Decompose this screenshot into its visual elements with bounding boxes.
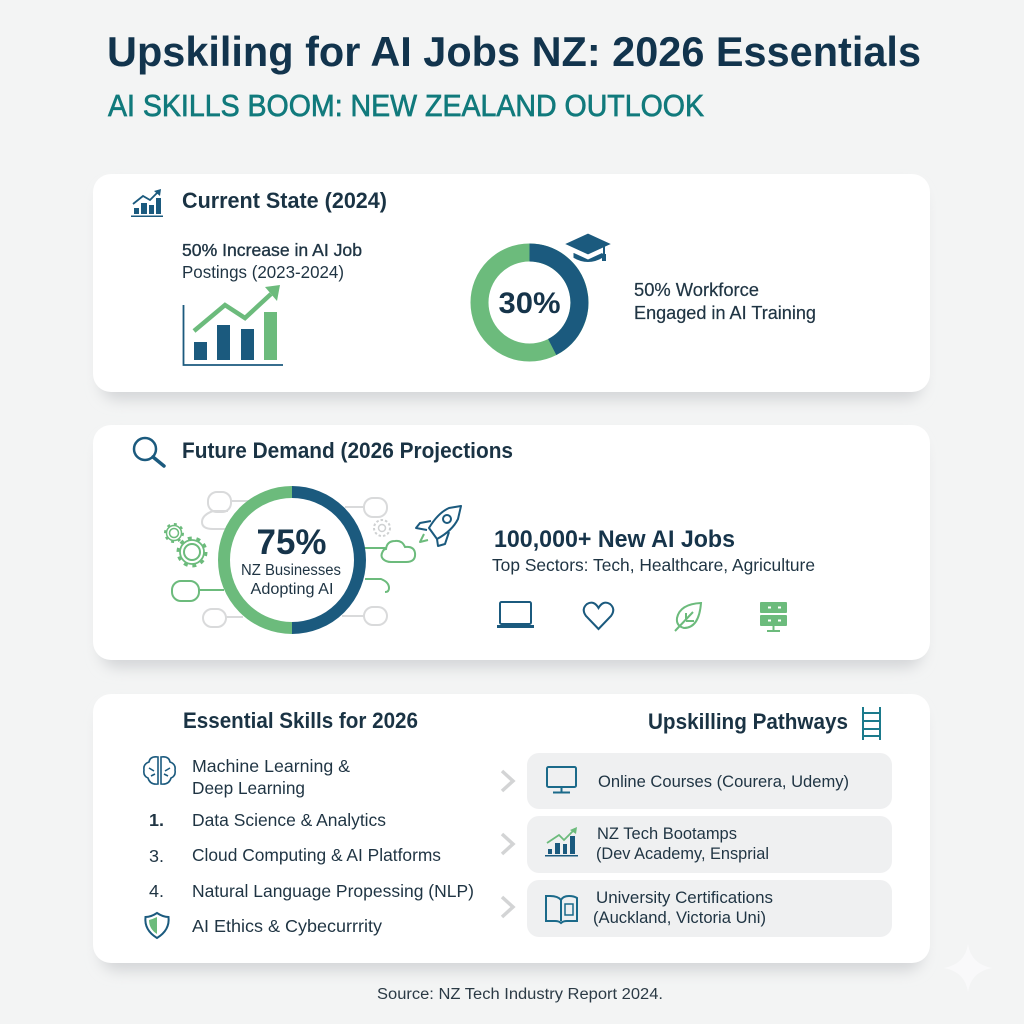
panel: future demand — [93, 425, 930, 668]
stat: workforce — [634, 280, 816, 323]
label: university: University Certifications — [596, 888, 773, 907]
icon: book — [546, 896, 577, 923]
icon: cloud — [382, 541, 415, 562]
stat: job postings: 50% Increase in AI Job — [182, 240, 362, 260]
stat: workforce: Engaged in AI Training — [634, 303, 816, 323]
panel: current state — [93, 174, 930, 400]
donut chart: 75% — [224, 492, 360, 628]
icon: ladder — [863, 707, 880, 740]
panel: skills and pathways — [93, 694, 930, 971]
stat: new jobs: 100,000+ New AI Jobs — [494, 526, 735, 553]
text: top sectors: Top Sectors: Tech, Healthcare, Agriculture — [492, 555, 815, 575]
icon: laptop — [497, 602, 534, 626]
skills list: 4. — [149, 881, 164, 901]
skills list: Cloud Computing & AI Platforms — [192, 845, 441, 865]
label: university — [593, 888, 773, 927]
icon: shield — [145, 913, 169, 938]
skills list: Deep Learning — [192, 778, 305, 798]
network nodes — [172, 492, 389, 627]
skills list: Machine Learning & — [192, 756, 350, 776]
source note: Source: NZ Tech Industry Report 2024. — [377, 986, 663, 1003]
stat: job postings: Postings (2023-2024) — [182, 262, 344, 282]
skills list: Data Science & Analytics — [192, 810, 386, 830]
sparkle mark — [944, 944, 992, 992]
donut chart: 75%: Adopting AI — [250, 581, 334, 598]
donut chart: 75%: 75% — [256, 523, 326, 562]
label: bootcamps — [596, 824, 769, 863]
donut chart: 30%: 30% — [498, 287, 560, 320]
icon: gears — [165, 524, 206, 566]
icon: bootcamp chart — [545, 827, 578, 856]
label: online courses: Online Courses (Courera, Udemy) — [598, 772, 849, 791]
icon: monitor — [547, 767, 576, 792]
icon: brain — [144, 757, 175, 784]
donut chart: 75%: NZ Businesses — [241, 562, 341, 579]
icon: small grey gear — [374, 520, 390, 536]
title: Upskiling for AI Jobs NZ: 2026 Essentials — [107, 28, 921, 75]
icon: server — [760, 602, 787, 632]
label: university: (Auckland, Victoria Uni) — [593, 908, 766, 927]
icon: magnifier — [134, 438, 164, 466]
bar chart with arrow — [184, 285, 283, 365]
donut chart: 30% — [480, 252, 580, 352]
label: bootcamps: (Dev Academy, Ensprial — [596, 844, 769, 863]
icon: rocket — [416, 506, 461, 546]
heading: essential skills: Essential Skills for 2026 — [183, 708, 418, 733]
stat: job postings — [182, 240, 362, 282]
pathway: bootcamps — [527, 816, 892, 873]
skills list: AI Ethics & Cybecurrrity — [192, 916, 382, 936]
pathway: university — [527, 880, 892, 937]
heading: upskilling pathways: Upskilling Pathways — [648, 709, 848, 734]
label: bootcamps: NZ Tech Bootamps — [597, 824, 737, 843]
heading: future demand: Future Demand (2026 Projections — [182, 438, 513, 463]
icon: graduation cap — [564, 233, 612, 262]
skills list: 1. — [149, 810, 164, 830]
icon: heart — [584, 603, 613, 629]
stat: workforce: 50% Workforce — [634, 280, 759, 300]
subtitle: AI SKILLS BOOM: NEW ZEALAND OUTLOOK — [108, 88, 704, 123]
icon: growth chart small — [131, 189, 163, 217]
pathway: online courses — [527, 753, 892, 809]
skills list — [149, 756, 474, 936]
skills list: 3. — [149, 846, 164, 866]
icon: leaf — [675, 603, 701, 631]
heading: current state: Current State (2024) — [182, 188, 387, 213]
chevrons — [502, 771, 513, 917]
skills list: Natural Language Propessing (NLP) — [192, 881, 474, 901]
